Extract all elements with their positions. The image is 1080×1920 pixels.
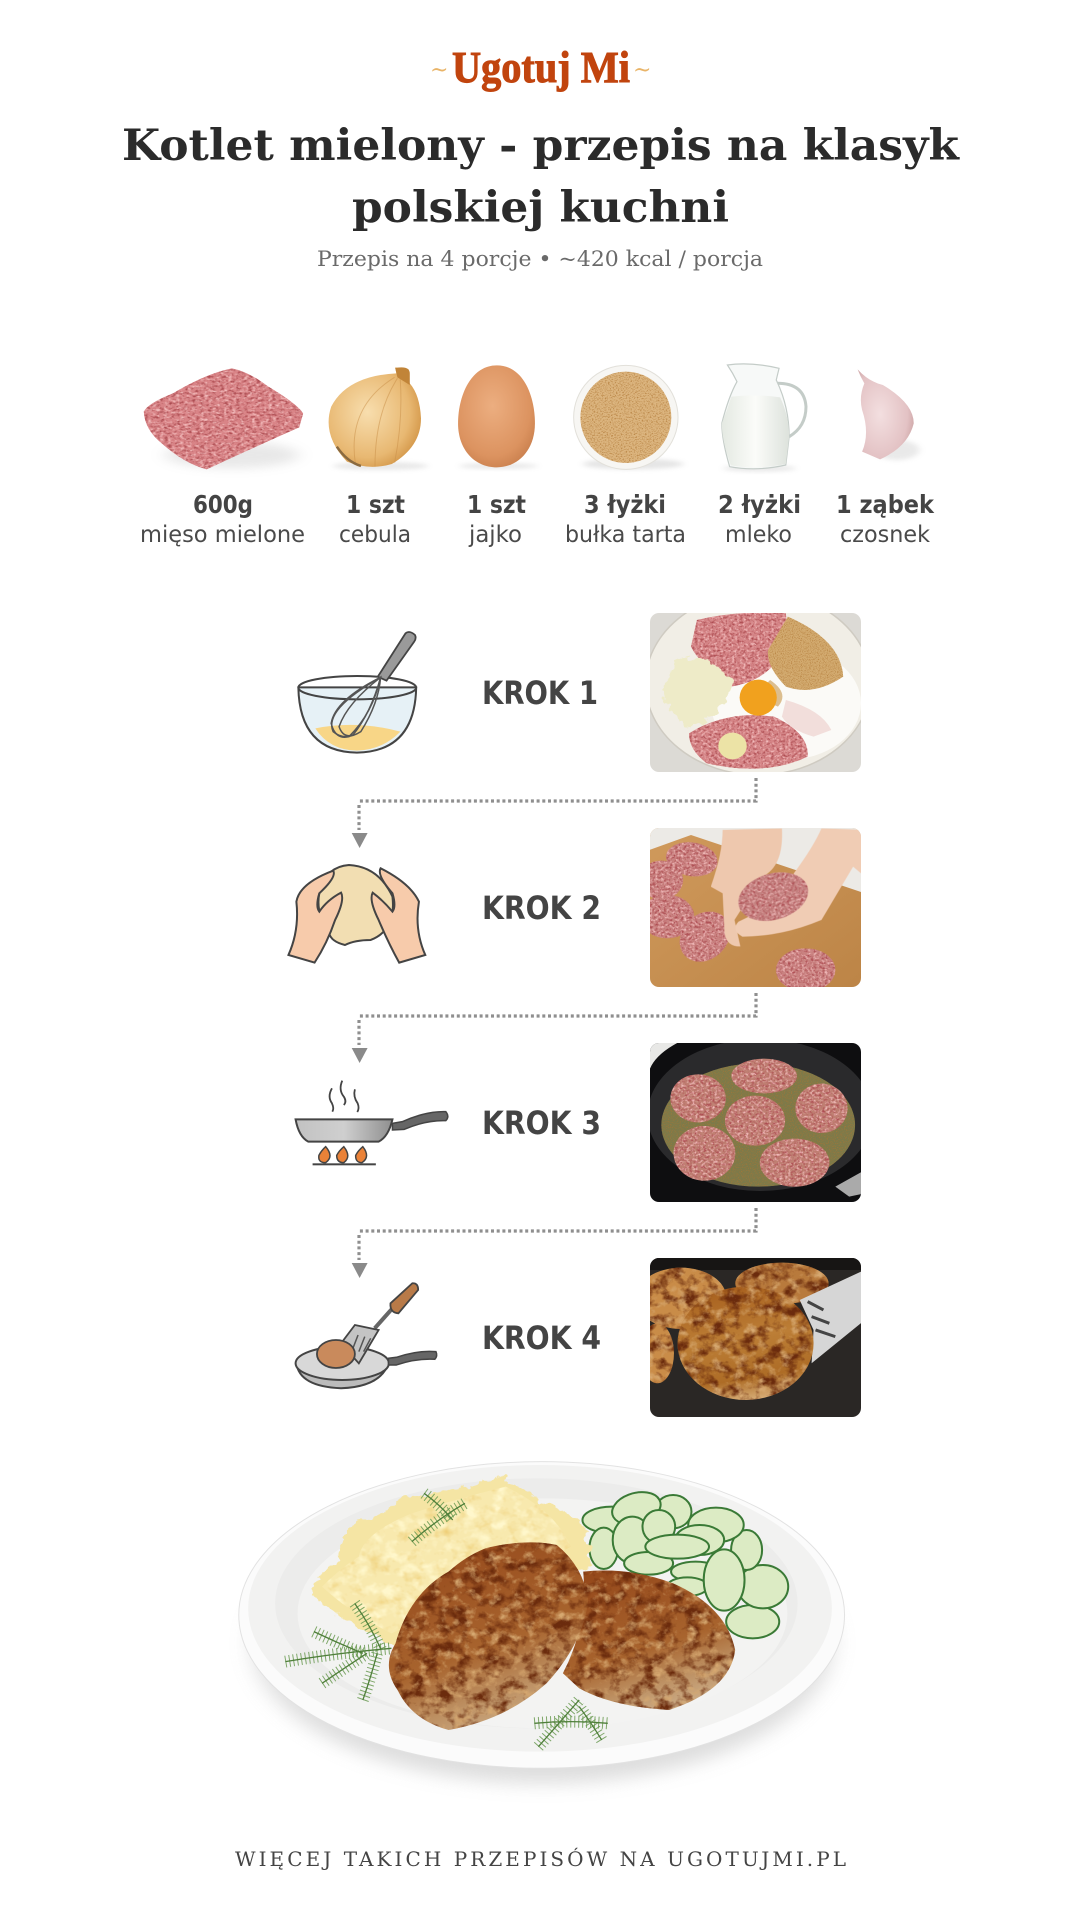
step label: KROK 1 — [482, 674, 598, 712]
subtitle: Przepis na 4 porcje • ~420 kcal / porcja — [317, 247, 763, 271]
ingredient label: egg — [467, 490, 526, 548]
plate shadow — [253, 1503, 832, 1783]
icon: whisk and bowl — [298, 632, 416, 753]
panel: step 4 — [296, 1257, 865, 1420]
step label: KROK 3 — [482, 1104, 601, 1142]
photo: patties in pan — [650, 1043, 861, 1202]
ingredient label: milk: 2 łyżki — [718, 490, 801, 519]
ingredient label: egg: 1 szt — [467, 490, 526, 519]
plate — [239, 1462, 845, 1768]
photo: mixing bowl — [650, 613, 861, 772]
ingredient label: garlic: czosnek — [840, 522, 931, 548]
panel: step 3 — [296, 1039, 873, 1278]
back cutlet — [563, 1570, 735, 1710]
ingredient label: onion: cebula — [339, 522, 411, 548]
ingredient label: meat: 600g — [193, 490, 253, 519]
ingredient label: onion — [339, 490, 411, 548]
ingredient label: meat: mięso mielone — [140, 522, 305, 548]
ingredient label: egg: jajko — [468, 522, 522, 548]
ingredient label: breadcrumbs: bułka tarta — [565, 522, 686, 548]
front cutlet — [389, 1542, 588, 1730]
ingredient label: milk — [718, 490, 801, 548]
ingredient label: meat — [140, 490, 305, 548]
mashed potatoes — [312, 1477, 591, 1647]
logo: ~ — [430, 58, 448, 83]
title: polskiej kuchni — [352, 183, 729, 233]
dill garnish — [285, 1493, 608, 1747]
icon: hands kneading — [288, 865, 425, 963]
photo: shaping patties — [640, 827, 865, 992]
panel: ingredients — [140, 364, 935, 548]
connector arrow 1 to 2 — [352, 778, 756, 848]
ingredient label: onion: 1 szt — [346, 490, 405, 519]
photo: flipping golden patty — [650, 1258, 861, 1417]
logo: Ugotuj Mi — [452, 43, 630, 92]
header — [122, 43, 960, 271]
title: Kotlet mielony - przepis na klasyk — [122, 121, 960, 171]
footer text: WIĘCEJ TAKICH PRZEPISÓW NA UGOTUJMI.PL — [235, 1846, 846, 1871]
ingredient label: breadcrumbs: 3 łyżki — [584, 490, 666, 519]
icon: egg — [458, 365, 538, 469]
panel: step 2 — [288, 827, 865, 1063]
connector arrow 2 to 3 — [352, 993, 756, 1063]
icon: bowl of breadcrumbs — [574, 365, 684, 469]
step label: KROK 2 — [482, 889, 601, 927]
icon: frying pan on flame — [296, 1081, 448, 1165]
cucumber salad — [582, 1486, 788, 1638]
ingredient label: garlic: 1 ząbek — [836, 490, 935, 519]
icon: onion — [329, 367, 428, 470]
step label: KROK 4 — [482, 1319, 601, 1357]
icon: garlic — [858, 369, 919, 460]
icon: minced meat — [144, 368, 303, 469]
icon: milk jug — [722, 364, 806, 472]
panel: finished dish — [239, 1462, 845, 1783]
panel: step 1 — [298, 592, 871, 848]
connector arrow 3 to 4 — [352, 1208, 756, 1278]
ingredient label: breadcrumbs — [565, 490, 686, 548]
ingredient label: milk: mleko — [725, 522, 792, 548]
logo: ~ — [633, 58, 651, 83]
title — [122, 121, 960, 233]
ingredient label: garlic — [836, 490, 935, 548]
icon: spatula flipping patty — [296, 1283, 437, 1388]
